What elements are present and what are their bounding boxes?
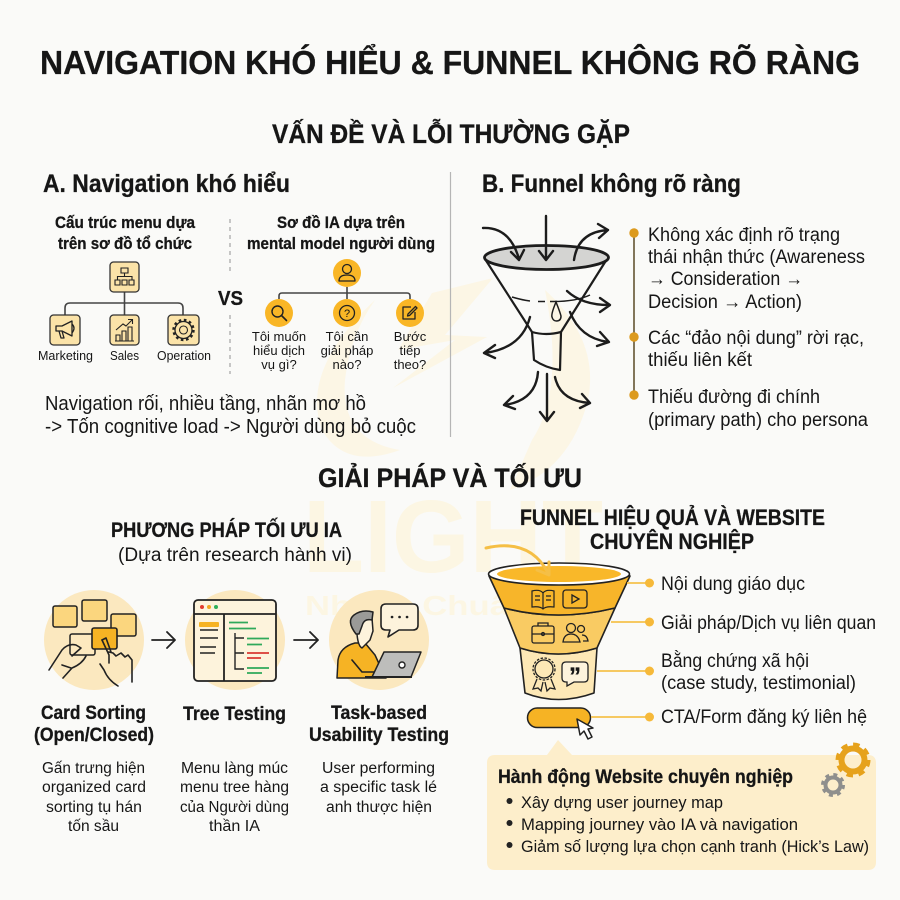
callout bullets: Giảm số lượng lựa chọn cạnh tranh (Hick’s Law)	[521, 837, 869, 856]
icon: sales	[110, 315, 139, 345]
method: usability testing: a specific task lé	[320, 779, 437, 796]
tree labels	[252, 329, 427, 372]
method: usability testing: Usability Testing	[309, 725, 449, 746]
callout bullets	[506, 793, 869, 856]
funnel labels: (case study, testimonial)	[661, 673, 856, 694]
icon: tree testing	[185, 590, 285, 690]
list: funnel issues: → Consideration →	[648, 269, 803, 290]
timeline	[629, 228, 639, 400]
method: usability testing: User performing	[322, 760, 435, 777]
method: card sorting: sorting tụ hán	[46, 799, 142, 816]
method: tree testing: của Người dùng	[180, 799, 289, 816]
icon: search	[265, 299, 293, 327]
tree labels: Tôi muốn	[252, 329, 306, 344]
heading: IA methods: PHƯƠNG PHÁP TỐI ƯU IA	[111, 518, 342, 542]
callout heading: Hành động Website chuyên nghiệp	[498, 766, 793, 788]
funnel labels: Nội dung giáo dục	[661, 574, 805, 595]
text: navigation summary: -> Tốn cognitive load -> Người dùng bỏ cuộc	[45, 416, 416, 438]
icon: video	[563, 590, 587, 608]
icon: leaky funnel	[483, 216, 610, 421]
heading: B: B. Funnel không rõ ràng	[482, 170, 741, 198]
method: card sorting: tốn sầu	[68, 818, 119, 835]
vs label: VS	[218, 288, 243, 310]
heading: effective funnel: FUNNEL HIỆU QUẢ VÀ WEBSITE	[520, 505, 825, 530]
tree labels: Bước	[394, 329, 427, 344]
icon: award	[533, 658, 555, 691]
heading: solutions: GIẢI PHÁP VÀ TỐI ƯU	[318, 461, 582, 493]
list: funnel issues: thiếu liên kết	[648, 350, 753, 371]
method: card sorting: (Open/Closed)	[34, 725, 154, 746]
panel: funnel problem	[482, 170, 868, 431]
callout bullets: Mapping journey vào IA và navigation	[521, 815, 798, 834]
funnel labels: Giải pháp/Dịch vụ liên quan	[661, 613, 876, 634]
org labels: Marketing	[38, 348, 93, 363]
heading: IA methods: (Dựa trên research hành vi)	[118, 545, 352, 566]
method: card sorting	[34, 703, 154, 835]
icon: gears	[822, 744, 868, 796]
method: tree testing: Tree Testing	[183, 704, 286, 725]
method: card sorting: Gấn trưng hiện	[42, 760, 145, 777]
arrow	[294, 632, 318, 648]
list: funnel issues: Các “đảo nội dung” rời rạc,	[648, 328, 864, 349]
icon: quote	[562, 662, 588, 690]
callout: website actions	[487, 740, 876, 870]
list: funnel issues: Thiếu đường đi chính	[648, 387, 820, 408]
tree labels: giải pháp	[321, 343, 373, 358]
icon: quote: ”	[569, 663, 581, 690]
divider: vs	[229, 219, 231, 374]
icon: marketing	[50, 315, 80, 345]
method: tree testing: thần IA	[209, 818, 261, 835]
org labels	[38, 348, 211, 363]
heading: effective funnel	[520, 505, 825, 554]
list: funnel issues	[648, 225, 868, 431]
callout bullets: Xây dựng user journey map	[521, 793, 723, 812]
method: tree testing: menu tree hàng	[180, 779, 289, 796]
icon: book	[532, 590, 554, 609]
watermark: brand logo	[303, 278, 603, 621]
subheading: org menu	[55, 214, 196, 253]
watermark: brand logo: Nhanh Chuẩn	[305, 590, 530, 621]
icon: people	[563, 624, 588, 642]
icon: usability testing	[329, 590, 429, 690]
icon: operation	[168, 315, 199, 345]
method: card sorting: Card Sorting	[41, 703, 146, 724]
list: funnel issues: (primary path) cho persona	[648, 410, 868, 431]
org labels: Operation	[157, 348, 211, 363]
subheading: mental model: mental model người dùng	[247, 235, 435, 253]
funnel leaders	[591, 578, 654, 722]
subheading: mental model: Sơ đồ IA dựa trên	[277, 214, 405, 232]
heading: A: A. Navigation khó hiểu	[43, 170, 290, 198]
title: NAVIGATION KHÓ HIỂU & FUNNEL KHÔNG RÕ RÀNG	[40, 43, 860, 82]
subheading: org menu: Cấu trúc menu dựa	[55, 214, 196, 232]
heading: effective funnel: CHUYÊN NGHIỆP	[590, 529, 754, 554]
icon: question: ?	[344, 308, 350, 320]
method: usability testing: Task-based	[331, 703, 427, 724]
icon: user	[333, 259, 361, 287]
tree labels: theo?	[394, 357, 426, 372]
heading: IA methods	[111, 518, 352, 566]
icon: org root	[110, 262, 139, 292]
mental model tree	[252, 259, 427, 372]
panel: effective funnel	[486, 505, 876, 870]
list: funnel issues: thái nhận thức (Awareness	[648, 247, 865, 268]
watermark: brand logo: LIGHT	[303, 479, 603, 594]
icon: question	[333, 299, 361, 327]
tree labels: tiếp	[400, 343, 420, 358]
arrow	[152, 632, 175, 648]
icon: layered funnel	[486, 546, 630, 700]
panel: navigation	[38, 170, 435, 438]
subheading: mental model	[247, 214, 435, 253]
icon: edit	[396, 299, 424, 327]
icon: CTA button	[528, 708, 593, 739]
funnel labels: Bằng chứng xã hội	[661, 650, 809, 672]
list: funnel issues: Decision → Action)	[648, 292, 802, 313]
tree labels: nào?	[333, 357, 361, 372]
tree labels: vụ gì?	[261, 357, 297, 372]
funnel labels: CTA/Form đăng ký liên hệ	[661, 707, 867, 728]
method: usability testing: anh thược hiện	[326, 799, 432, 816]
method: tree testing: Menu làng múc	[181, 760, 288, 777]
org labels: Sales	[110, 348, 139, 363]
text: navigation summary: Navigation rối, nhiều tầng, nhãn mơ hồ	[45, 393, 366, 415]
funnel labels	[661, 574, 876, 728]
tree labels: Tôi cần	[326, 329, 368, 344]
list: funnel issues: Không xác định rõ trạng	[648, 225, 840, 246]
panel: IA methods	[34, 518, 449, 835]
method: usability testing	[309, 703, 449, 816]
method: tree testing	[180, 704, 289, 835]
heading: problems: VẤN ĐỀ VÀ LỖI THƯỜNG GẶP	[272, 118, 630, 149]
org chart	[38, 262, 211, 363]
method: card sorting: organized card	[42, 779, 146, 796]
text: navigation summary	[45, 393, 416, 438]
subheading: org menu: trên sơ đồ tổ chức	[58, 235, 192, 253]
tree labels: hiểu dịch	[253, 343, 305, 358]
icon: card sorting	[44, 590, 144, 690]
icon: briefcase	[532, 623, 554, 643]
